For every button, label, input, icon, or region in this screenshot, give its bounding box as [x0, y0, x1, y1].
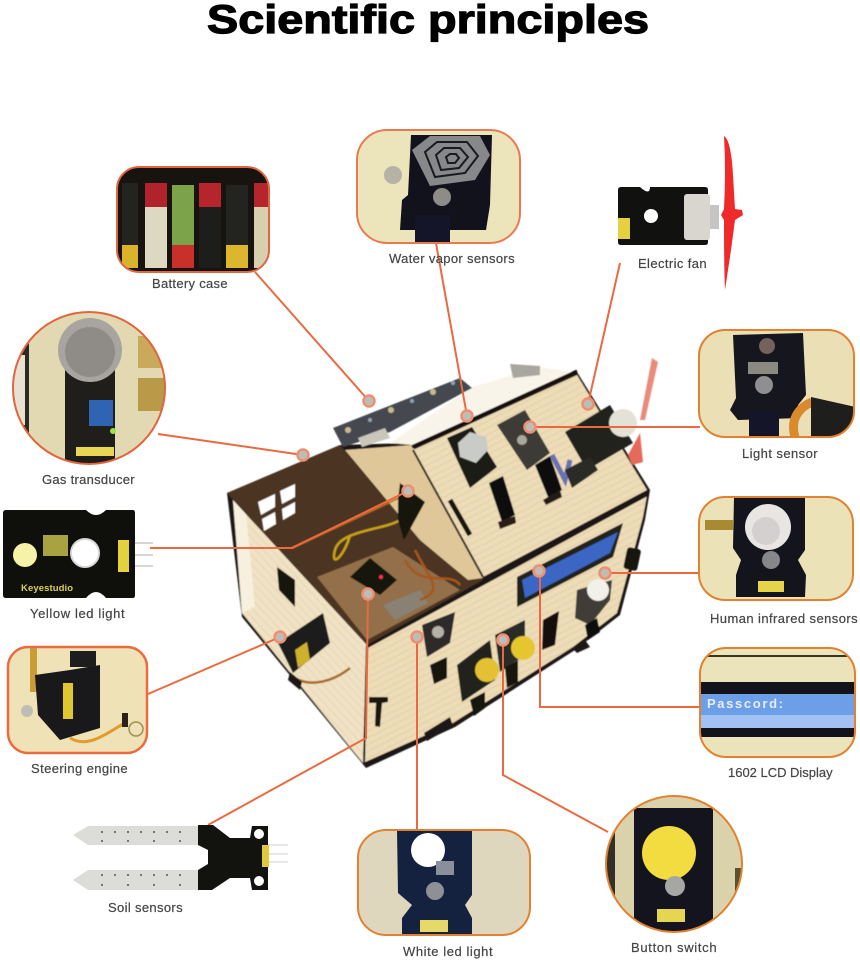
- interior sensor and wires: [292, 495, 460, 620]
- connector dots: [274, 396, 610, 646]
- servo: [278, 613, 350, 683]
- window panes: [258, 484, 295, 531]
- label: steering engine: Steering engine: [31, 761, 128, 776]
- interior back wall: [227, 445, 483, 645]
- probe dots: [101, 831, 181, 886]
- motor: [684, 194, 710, 240]
- white led on wall: [422, 612, 455, 684]
- led pins: [130, 543, 153, 566]
- panel: steering engine: [8, 647, 147, 753]
- battery bar: [333, 378, 472, 447]
- pcb: [198, 825, 268, 890]
- panel: 1602 lcd display: [700, 648, 855, 757]
- label: button switch: Button switch: [631, 940, 717, 955]
- panel: water vapor sensor: [357, 130, 520, 243]
- main house model: [227, 358, 658, 768]
- interior floor: [317, 547, 460, 640]
- pads: [43, 535, 68, 556]
- dark slot on front wall: [542, 611, 559, 650]
- brand text: Keyestudio: [21, 583, 73, 594]
- board: [3, 510, 135, 598]
- left button module: [457, 640, 499, 716]
- panel: light sensor: [699, 330, 860, 437]
- label: 1602 lcd display: 1602 LCD Display: [728, 765, 833, 780]
- panel: battery case: [117, 167, 269, 272]
- left wall frame: [233, 500, 255, 613]
- label: yellow led light: Yellow led light: [30, 606, 125, 621]
- base tabs: [288, 640, 590, 741]
- pins: [262, 845, 269, 867]
- electric fan module: [618, 136, 743, 290]
- top front edge: [367, 495, 647, 647]
- house base shadow outline: [227, 372, 650, 768]
- fan mount hole: [644, 209, 658, 223]
- pcb holes: [254, 829, 264, 839]
- front wall: [363, 495, 647, 763]
- connector lines: [148, 243, 700, 832]
- wall edge: [364, 645, 367, 763]
- panel: button switch: [606, 796, 743, 932]
- left wall slot: [277, 567, 295, 607]
- panel: white led light: [358, 830, 530, 935]
- light sensor on roof: [497, 410, 570, 505]
- pir sensor: [575, 547, 641, 640]
- left wall: [233, 500, 367, 763]
- gable side panel: [345, 445, 483, 580]
- panel: yellow led light: [3, 510, 153, 598]
- upper probe: [73, 826, 198, 845]
- label: human infrared sensors: Human infrared sensors: [710, 611, 858, 626]
- right button module: [495, 620, 535, 688]
- fan board: [618, 187, 708, 245]
- panel: soil sensor: [73, 825, 288, 890]
- panel: 1602 lcd display: Passcord:: [707, 696, 783, 711]
- panel: human infrared sensors: [699, 497, 853, 600]
- lcd display: [517, 523, 623, 607]
- label: light sensor: Light sensor: [742, 446, 818, 461]
- label: battery case: Battery case: [152, 276, 228, 291]
- panel: gas transducer: [13, 312, 165, 465]
- label: electric fan: Electric fan: [638, 256, 707, 271]
- label: water vapor sensors: Water vapor sensors: [389, 251, 515, 266]
- water sensor on roof: [447, 427, 516, 529]
- fan on roof: [565, 358, 658, 488]
- header pins: [618, 218, 630, 239]
- white back roof: [390, 367, 573, 445]
- label: white led light: White led light: [403, 944, 493, 959]
- lower probe: [73, 870, 198, 890]
- led lamp: [13, 543, 37, 567]
- yellow led on gable: [398, 483, 425, 540]
- t shaped slot: [369, 697, 388, 727]
- roof panel: [412, 371, 647, 577]
- mount ring: [71, 539, 99, 567]
- header: [118, 540, 129, 572]
- label: gas transducer: Gas transducer: [42, 472, 135, 487]
- label: soil sensors: Soil sensors: [108, 900, 183, 915]
- small bracket behind roof: [510, 364, 540, 378]
- fan blade: [721, 136, 743, 290]
